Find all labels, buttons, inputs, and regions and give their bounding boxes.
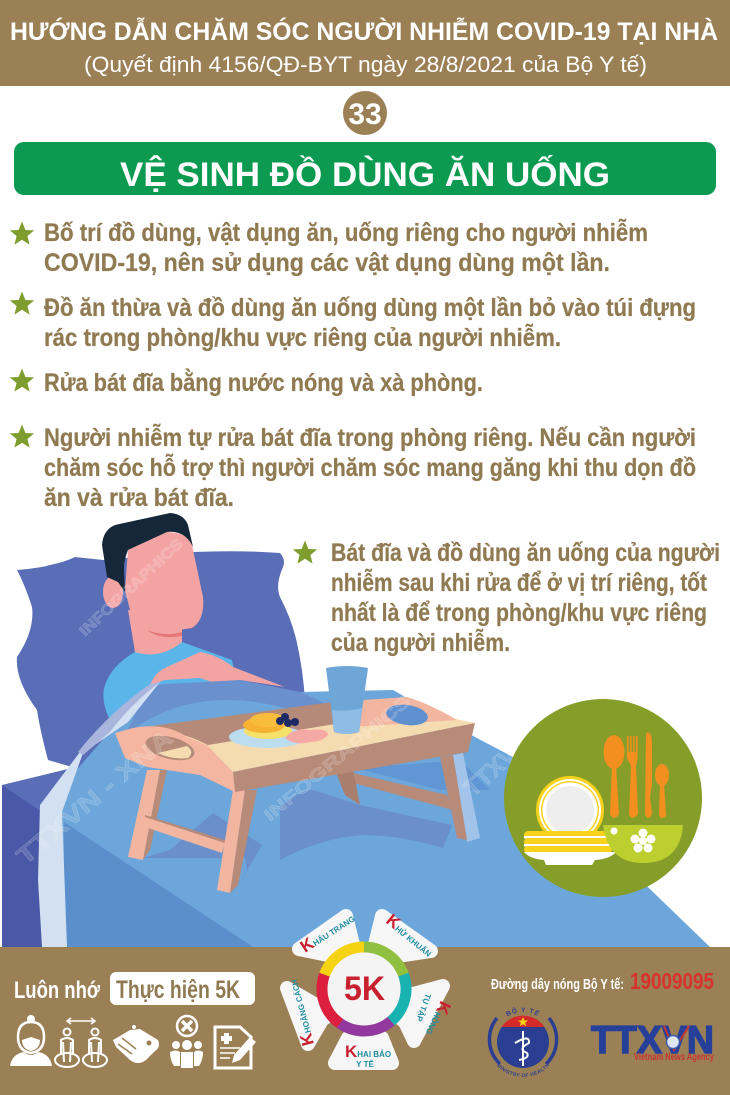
5K wheel: 5K: [344, 970, 385, 1008]
icon: person with mask: [10, 1015, 52, 1066]
petal: khẩu trang: KHẨU TRANG: [297, 908, 358, 956]
reminder pill: Thực hiện 5K: [116, 976, 240, 1004]
number badge: 33: [348, 98, 382, 131]
face: [125, 532, 203, 632]
tray handle end: [115, 726, 235, 792]
watermark: INFOGRAPHICS: [76, 535, 186, 640]
icon: washing hands: [113, 1025, 159, 1063]
watermark: TTXVN - XNA: [12, 725, 178, 871]
tray front legs: [128, 770, 160, 860]
hotline: Đường dây nóng Bộ Y tế:: [491, 977, 624, 993]
pillow: [17, 551, 305, 767]
blanket: [42, 685, 710, 947]
header band: [0, 0, 730, 86]
ear: [103, 576, 123, 608]
bullet 5: [293, 539, 720, 657]
section heading banner: VỆ SINH ĐỒ DÙNG ĂN UỐNG: [120, 155, 610, 194]
bowl: [603, 825, 683, 863]
section heading banner: [14, 142, 716, 195]
footer band: [0, 947, 730, 1095]
petal: không tụ tập: [364, 986, 455, 1041]
petal: khoảng cách: KHOẢNG CÁCH: [282, 978, 318, 1048]
icon: declaration form: [215, 1027, 256, 1068]
bullet 1: [10, 217, 648, 277]
logo: Bộ Y tế: BỘ Y TẾ: [506, 1007, 540, 1016]
bullet 1: Bố trí đồ dùng, vật dụng ăn, uống riêng cho người nhiễm: [44, 217, 648, 247]
number badge: [343, 91, 387, 135]
tray top: [137, 700, 475, 772]
tray back legs: [453, 753, 480, 842]
petal: khẩu trang: [297, 908, 364, 989]
tray blue mark: [385, 702, 429, 728]
watermark: TTXVN - XNA: [459, 682, 588, 802]
shirt: [103, 642, 240, 730]
bullet 2: rác trong phòng/khu vực riêng của người nhiễm.: [44, 322, 561, 352]
neck: [128, 610, 182, 654]
bullet 4: ăn và rửa bát đĩa.: [44, 484, 234, 512]
bullet 3: Rửa bát đĩa bằng nước nóng và xà phòng.: [44, 367, 483, 397]
hotline: 19009095: [630, 968, 714, 994]
plates: [536, 776, 604, 844]
petal: khử khuẩn: [364, 910, 438, 989]
hair: [102, 513, 193, 592]
icon: two people keeping distance: [55, 1018, 107, 1067]
arm: [150, 652, 285, 687]
logo: Bộ Y tế: [488, 1007, 558, 1077]
hotline: [491, 968, 714, 994]
leg shadows: [280, 790, 452, 860]
watermark: INFOGRAPHICS: [260, 692, 414, 825]
bullet 1: COVID-19, nên sử dụng các vật dụng dùng một lần.: [44, 249, 610, 277]
title: HƯỚNG DẪN CHĂM SÓC NGƯỜI NHIỄM COVID-19 TẠI NHÀ: [10, 16, 718, 46]
subtitle: (Quyết định 4156/QĐ-BYT ngày 28/8/2021 của Bộ Y tế): [84, 52, 647, 77]
watermark: [12, 535, 588, 871]
logo: Bộ Y tế: MINISTRY OF HEALTH: [496, 1064, 550, 1077]
bullet 2: [10, 292, 696, 352]
blanket stripe: [38, 682, 160, 947]
petal: khai báo y tế: Y TẾ: [356, 1059, 374, 1069]
petal: khoảng cách: [282, 978, 364, 1048]
petal: khử khuẩn: KHỬ KHUẨN: [382, 910, 438, 960]
reminder label: Luôn nhớ: [14, 977, 101, 1004]
plate with food: [229, 713, 328, 748]
illustration: patient in bed with tray: [2, 513, 710, 947]
5K wheel: [282, 908, 455, 1069]
petal: khai báo y tế: KHAI BÁO: [345, 1042, 391, 1061]
logo: TTXVN: TTXVN: [591, 1019, 714, 1062]
glass: [326, 666, 368, 734]
icon: tableware in green circle: [504, 699, 702, 897]
bullet 5: của người nhiễm.: [331, 627, 510, 657]
bullet 4: [10, 422, 696, 512]
cutlery: [604, 732, 669, 818]
ring: [322, 947, 406, 1031]
icon: group with forbidden mark: [170, 1016, 203, 1068]
mattress: [2, 740, 120, 947]
petal: không tụ tập: TỤ TẬP: [414, 992, 433, 1023]
blanket fold: [125, 680, 345, 735]
front of blanket: [64, 822, 253, 947]
petal: khai báo y tế: [335, 1038, 392, 1069]
petal: không tụ tập: KHÔNG: [422, 998, 455, 1039]
tray front apron: [233, 723, 475, 792]
